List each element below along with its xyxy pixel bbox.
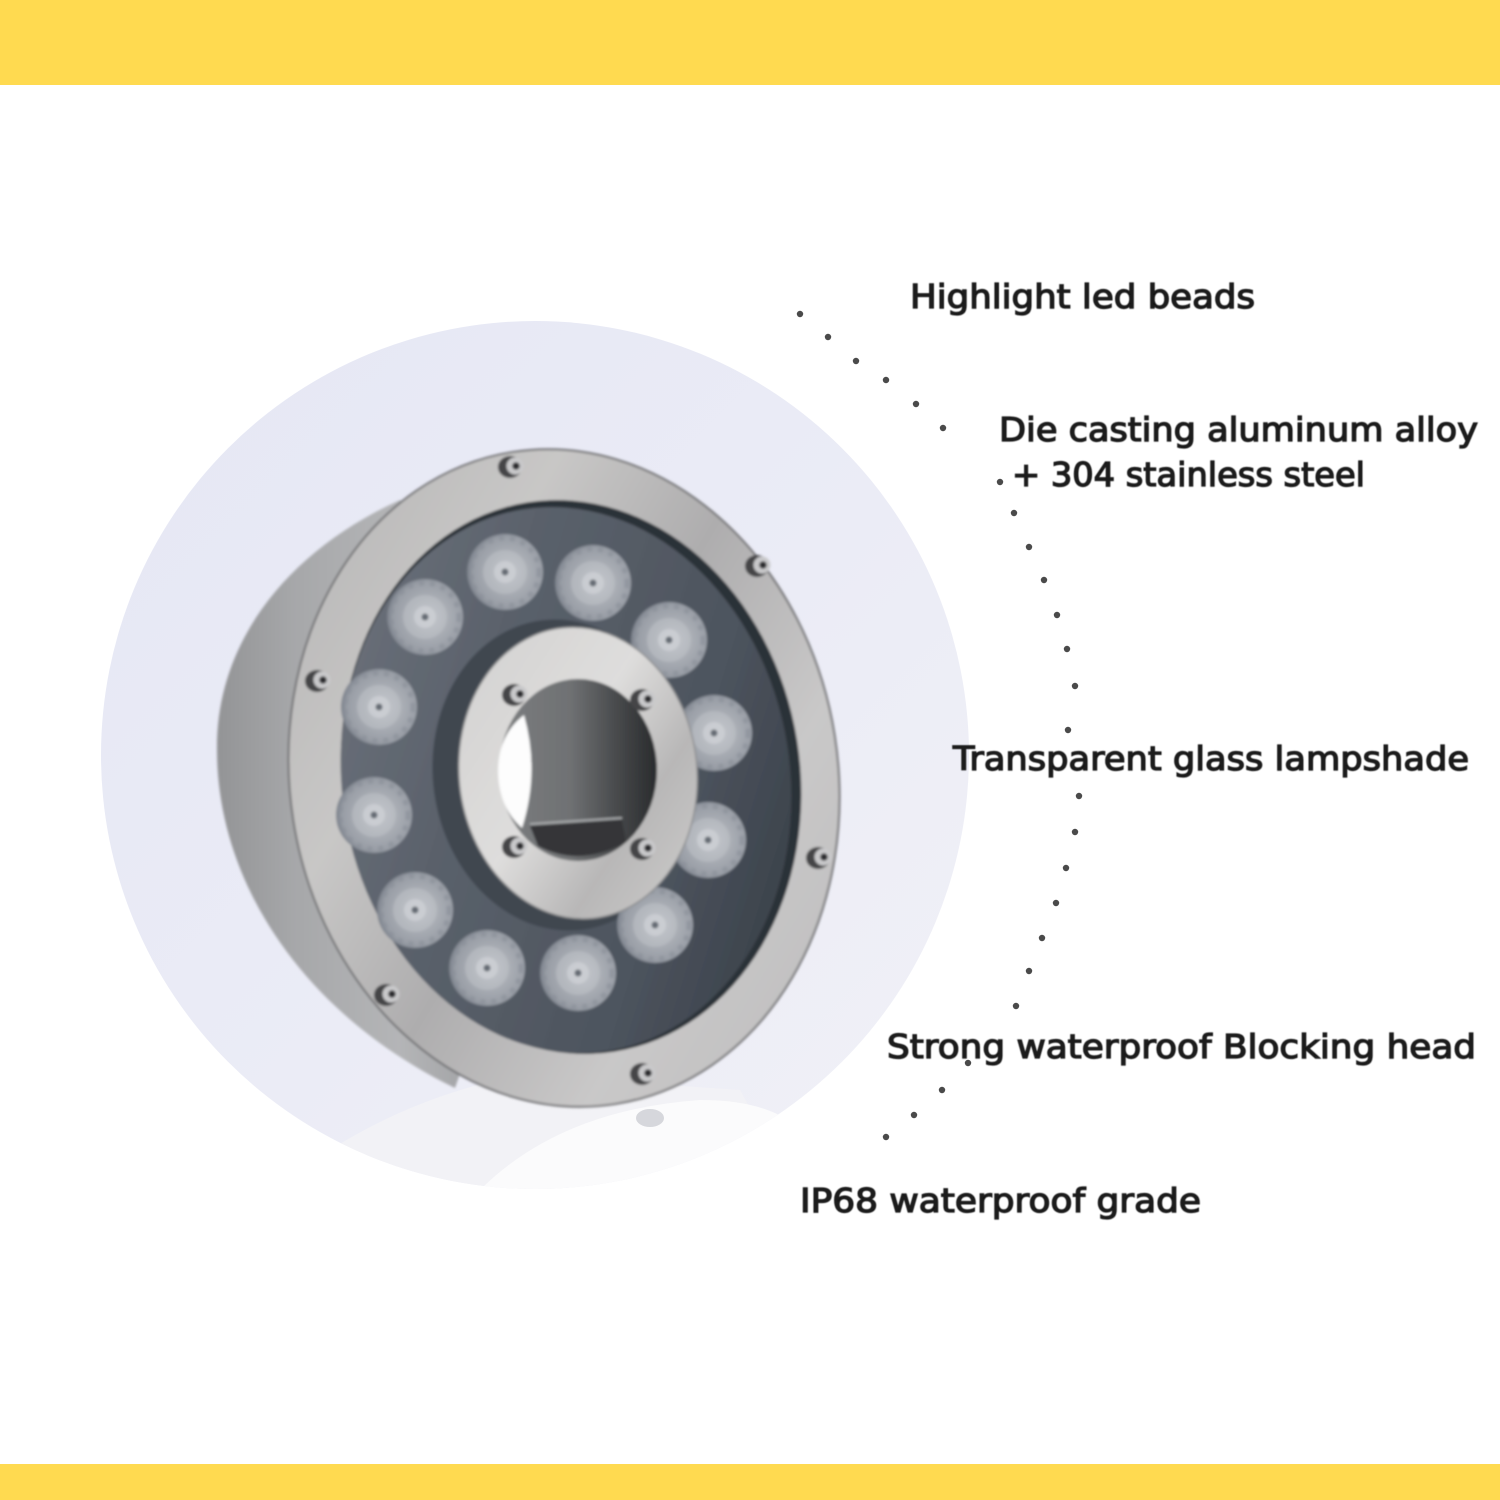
label: strong waterproof blocking head: Strong waterproof Blocking head xyxy=(887,1027,1476,1066)
glass lampshade xyxy=(302,474,830,1086)
white see-through crescent xyxy=(498,715,532,828)
label: transparent glass lampshade: Transparent glass lampshade xyxy=(952,739,1469,778)
dark glass edge xyxy=(301,467,841,1087)
background circle xyxy=(101,321,969,1189)
outer bolts xyxy=(305,456,832,1085)
hole inner ledge xyxy=(530,820,626,856)
bottom yellow band xyxy=(0,1464,1500,1500)
LED beads xyxy=(336,534,752,1011)
dark rim around centre xyxy=(413,603,711,947)
lamp body side xyxy=(217,500,520,1088)
dotted callout arc xyxy=(797,311,1082,1140)
outer stainless ring xyxy=(242,409,886,1147)
label: highlight led beads: Highlight led beads xyxy=(910,277,1255,316)
lamp reflection on surface xyxy=(484,1100,778,1189)
centre hole xyxy=(499,679,657,861)
label: 304 stainless steel: + 304 stainless steel xyxy=(1012,455,1365,494)
top yellow band xyxy=(0,0,1500,85)
label: die casting aluminum alloy: Die casting aluminum alloy xyxy=(999,410,1478,449)
inner stainless ring xyxy=(444,615,712,931)
inner bolts xyxy=(502,684,656,860)
product: ring light xyxy=(217,409,886,1147)
label: IP68 waterproof grade: IP68 waterproof grade xyxy=(800,1181,1201,1220)
